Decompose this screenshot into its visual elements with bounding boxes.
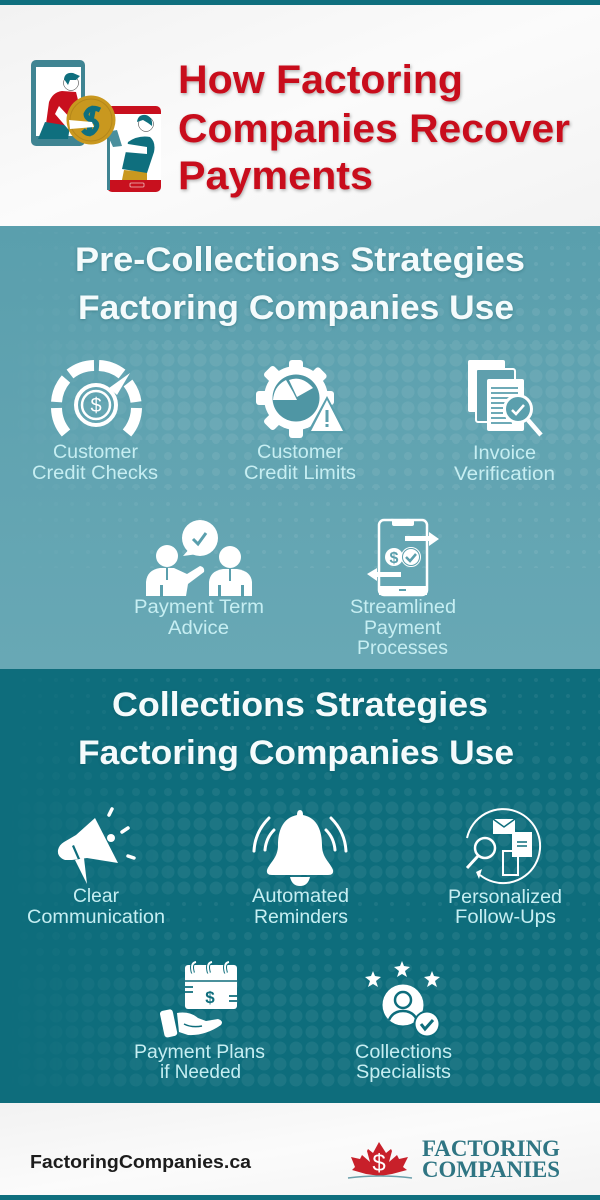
heading: pre-collections: Pre-Collections Strategies	[75, 241, 525, 279]
label: streamlined payment processes: Processes	[357, 638, 448, 659]
icon: credit gauge	[56, 366, 136, 433]
label: collections specialists: Collections	[355, 1042, 452, 1063]
icon: phone payment transfer	[367, 520, 439, 595]
label: customer credit checks: Customer	[53, 442, 139, 463]
heading: pre-collections	[75, 241, 525, 327]
label: invoice verification: Verification	[454, 464, 555, 485]
label: payment term advice: Payment Term	[134, 597, 264, 618]
bottom bar	[0, 1195, 600, 1200]
logo: factoring companies: COMPANIES	[422, 1157, 560, 1182]
header background	[0, 5, 600, 226]
top bar	[0, 0, 600, 5]
label: invoice verification	[454, 443, 555, 485]
label: payment plans if needed: Payment Plans	[134, 1042, 265, 1063]
icon: follow-up channels	[467, 809, 540, 883]
label: automated reminders: Reminders	[254, 907, 348, 928]
icon: gear with warning	[256, 360, 347, 438]
label: customer credit checks: Credit Checks	[32, 463, 158, 484]
heading: collections: Collections Strategies	[112, 686, 488, 724]
icon: specialist with stars	[365, 961, 440, 1038]
icon: documents with magnifier	[468, 360, 541, 435]
label: clear communication	[27, 886, 165, 928]
label: streamlined payment processes	[350, 597, 456, 659]
footer website: FactoringCompanies.ca	[30, 1152, 252, 1172]
title: How Factoring	[178, 58, 463, 102]
label: clear communication: Communication	[27, 907, 165, 928]
label: invoice verification: Invoice	[473, 443, 536, 464]
title: Payments	[178, 154, 373, 198]
icon: phone payment transfer: $	[390, 550, 399, 567]
panel: pre-collections strategies	[0, 226, 600, 669]
icon: two phones exchanging a coin	[31, 60, 161, 192]
label: collections specialists: Specialists	[356, 1062, 451, 1083]
label: personalized follow-ups: Follow-Ups	[455, 907, 556, 928]
label: customer credit limits: Credit Limits	[244, 463, 356, 484]
logo: factoring companies: $	[372, 1150, 386, 1177]
label: automated reminders	[252, 886, 349, 928]
label: personalized follow-ups: Personalized	[448, 887, 562, 908]
icon: two advisors with speech bubble	[146, 520, 252, 597]
label: payment term advice	[134, 597, 264, 639]
logo: factoring companies	[348, 1136, 560, 1182]
icon: megaphone	[58, 809, 134, 884]
label: payment term advice: Advice	[168, 618, 229, 639]
logo: factoring companies: FACTORING	[422, 1136, 560, 1161]
label: payment plans if needed	[134, 1042, 265, 1083]
icon: credit gauge: $	[90, 395, 102, 417]
heading: pre-collections: Factoring Companies Use	[78, 289, 514, 327]
label: collections specialists	[355, 1042, 452, 1083]
label: clear communication: Clear	[73, 886, 120, 907]
heading: collections: Factoring Companies Use	[78, 734, 514, 772]
heading: collections	[78, 686, 514, 772]
label: streamlined payment processes: Streamlined	[350, 597, 456, 618]
footer background	[0, 1103, 600, 1195]
title	[178, 58, 570, 198]
label: customer credit limits	[244, 442, 356, 484]
label: customer credit limits: Customer	[257, 442, 344, 463]
label: automated reminders: Automated	[252, 886, 349, 907]
label: customer credit checks	[32, 442, 158, 484]
label: payment plans if needed: if Needed	[160, 1062, 241, 1083]
icon: calendar and hand: $	[205, 988, 215, 1007]
icon: ringing bell	[254, 810, 346, 886]
title: Companies Recover	[178, 107, 570, 151]
label: streamlined payment processes: Payment	[364, 618, 442, 639]
panel: collections strategies	[0, 669, 600, 1103]
icon: calendar and hand	[159, 962, 237, 1038]
label: personalized follow-ups	[448, 887, 562, 928]
